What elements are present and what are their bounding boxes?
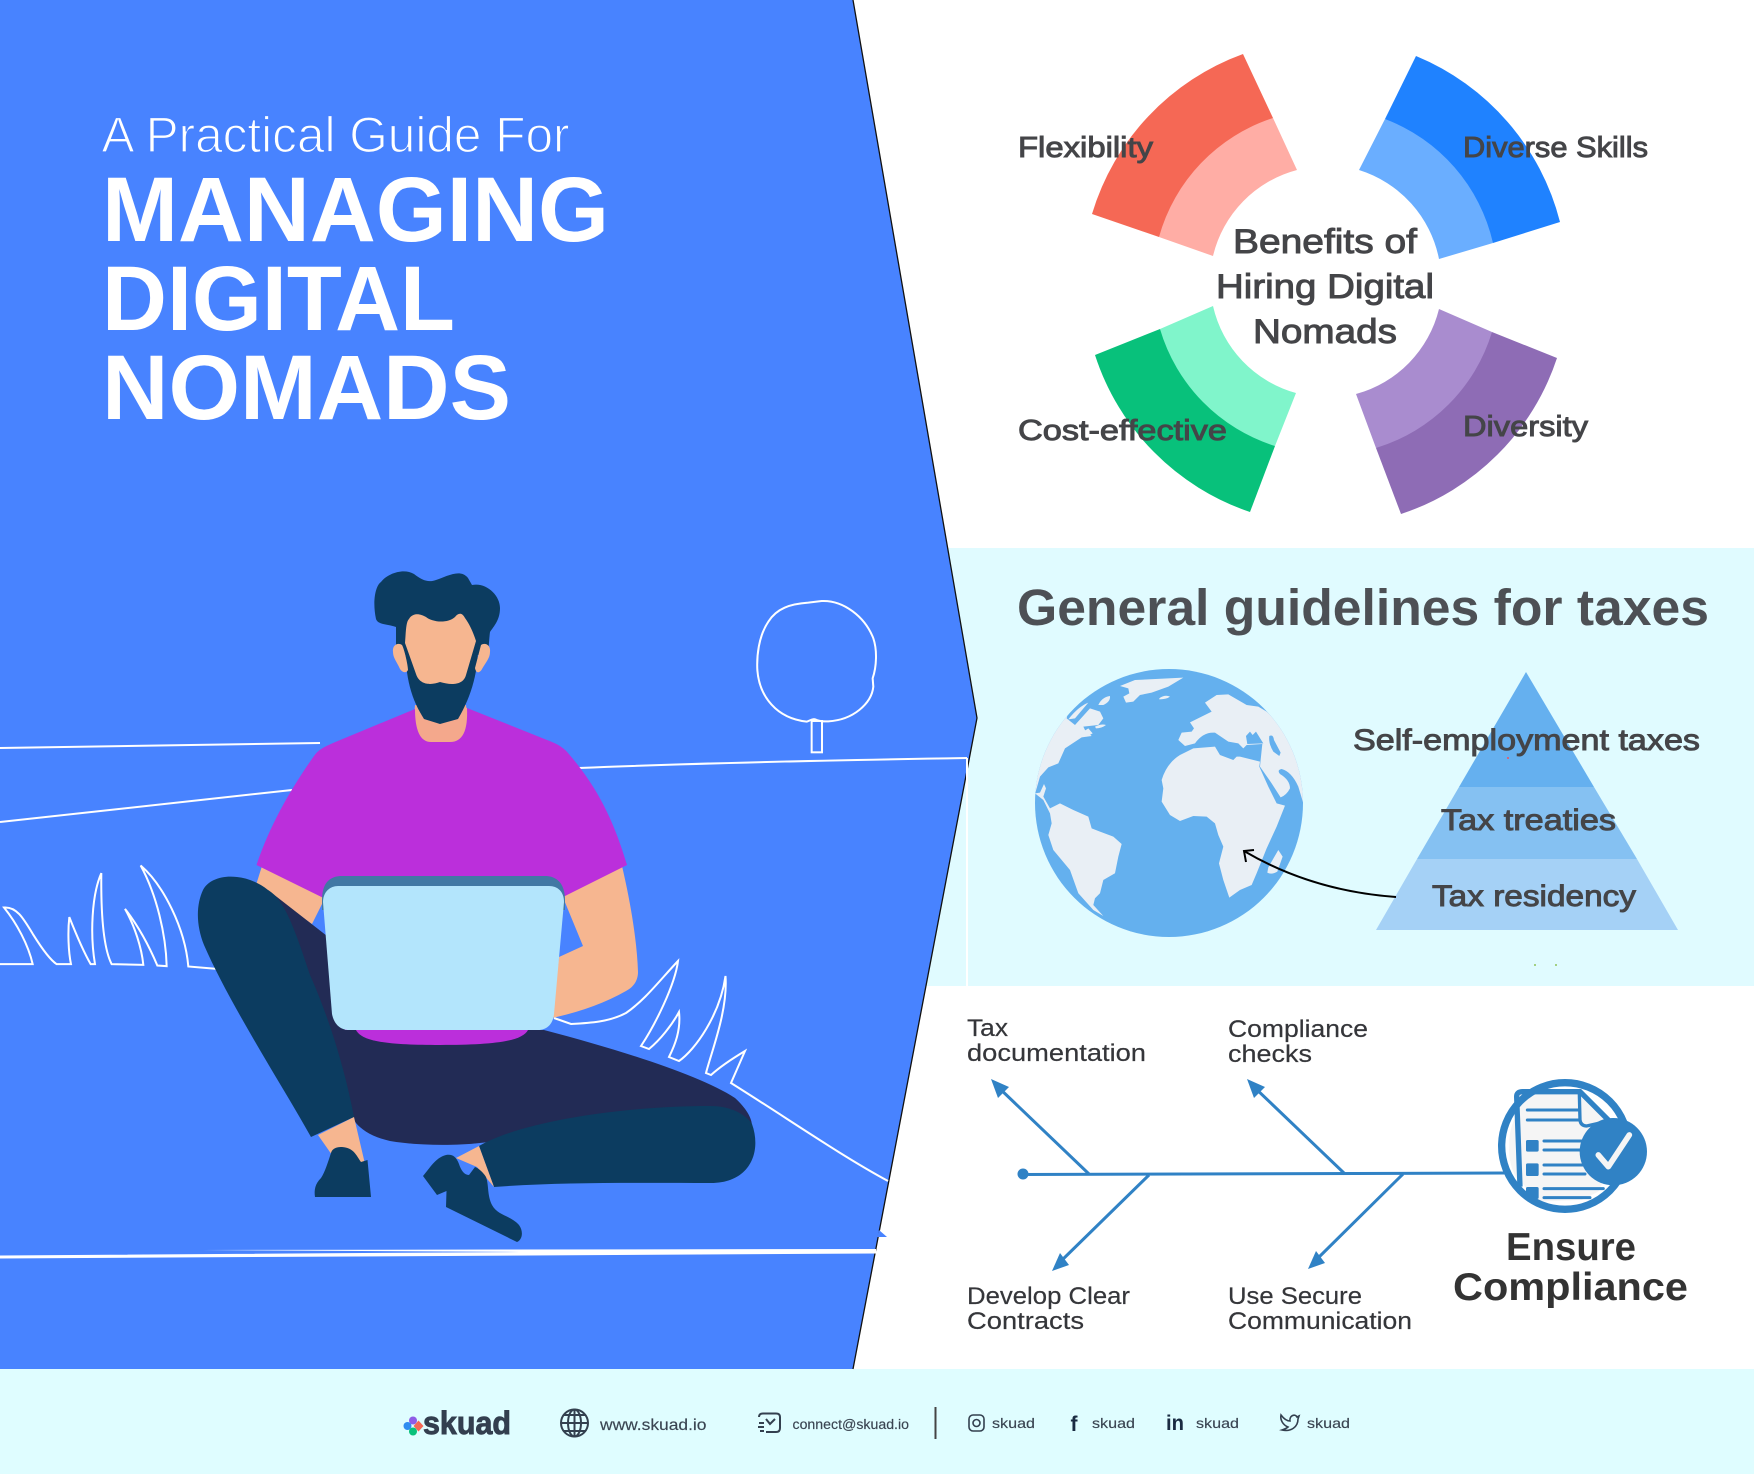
heading: ensure compliance: Compliance [1453, 1266, 1688, 1309]
text: instagram handle: skuad [992, 1415, 1035, 1431]
segment: diversity [1356, 309, 1557, 514]
level: tax residency [1376, 859, 1678, 930]
title [102, 107, 609, 439]
branch: compliance checks arrow [1247, 1079, 1345, 1174]
label: tax documentation: Tax [967, 1015, 1008, 1042]
text: email address: connect@skuad.io [792, 1417, 909, 1432]
label: use secure communication [1228, 1283, 1412, 1335]
panel: footer band [0, 1369, 1754, 1474]
icon: instagram [969, 1415, 984, 1431]
label: compliance checks [1228, 1016, 1368, 1068]
label: develop clear contracts: Contracts [967, 1308, 1084, 1335]
icon: tree outline [757, 601, 876, 752]
center title: benefits of hiring digital nomads: Benefits of [1233, 223, 1418, 261]
segment: flexibility [1092, 54, 1297, 256]
chart: fishbone diagram [967, 1015, 1505, 1335]
icon: grass outline [0, 865, 217, 969]
label: tax treaties: Tax treaties [1441, 804, 1616, 837]
face [405, 614, 476, 684]
subtitle: a practical guide for: A Practical Guide For [102, 107, 570, 163]
label: tax residency: Tax residency [1432, 880, 1636, 913]
right arm [552, 866, 638, 1018]
level: tax treaties [1417, 787, 1637, 859]
label: develop clear contracts [967, 1283, 1130, 1335]
label: flexibility: Flexibility [1018, 132, 1154, 164]
divider [934, 1407, 936, 1439]
footer contact row [404, 1405, 1350, 1441]
heading line: nomads: NOMADS [102, 337, 511, 439]
text: twitter handle: skuad [1307, 1415, 1350, 1431]
heading line: digital: DIGITAL [102, 248, 455, 350]
label: compliance checks: Compliance [1228, 1016, 1368, 1043]
heading: general guidelines for taxes: General guidelines for taxes [1017, 579, 1709, 636]
label: diversity: Diversity [1463, 411, 1589, 443]
level: self-employment taxes [1459, 672, 1594, 787]
label: compliance checks: checks [1228, 1041, 1312, 1068]
heading: ensure compliance: Ensure [1506, 1226, 1636, 1269]
neck [415, 705, 467, 742]
logo: skuad: skuad [423, 1405, 511, 1441]
shirt [256, 708, 627, 1044]
label: use secure communication: Use Secure [1228, 1283, 1362, 1310]
chart: tax pyramid [1353, 672, 1700, 966]
label: self-employment taxes: Self-employment taxes [1353, 724, 1700, 757]
icon: web globe [561, 1410, 588, 1436]
hair [374, 571, 500, 655]
icon: linkedin: in [1166, 1412, 1184, 1435]
heading line: managing: MANAGING [102, 159, 609, 261]
center title: benefits of hiring digital nomads [1216, 223, 1434, 351]
left leg [198, 877, 354, 1137]
branch: use secure communication arrow [1308, 1174, 1403, 1269]
chart: benefits radial segments [1018, 54, 1648, 514]
beard [405, 640, 478, 724]
laptop screen [323, 886, 564, 1030]
right lower leg [479, 1106, 755, 1187]
segment: cost-effective [1095, 306, 1296, 512]
text: facebook handle: skuad [1092, 1415, 1135, 1431]
center title: benefits of hiring digital nomads: Hiring Digital [1216, 268, 1434, 306]
center title: benefits of hiring digital nomads: Nomads [1253, 313, 1397, 351]
label: use secure communication: Communication [1228, 1308, 1412, 1335]
label: tax documentation: documentation [967, 1040, 1146, 1067]
right shoe [423, 1155, 522, 1242]
ears [393, 644, 490, 672]
spine [1023, 1173, 1505, 1174]
panel: blue left hero [0, 0, 977, 1369]
icon: facebook: f [1070, 1413, 1078, 1436]
branch: develop clear contracts arrow [1052, 1175, 1149, 1271]
icon: email [758, 1414, 780, 1432]
landscape outline drawing [0, 601, 967, 1258]
label: diverse skills: Diverse Skills [1463, 132, 1648, 164]
label: develop clear contracts: Develop Clear [967, 1283, 1130, 1310]
text: website: www.skuad.io [599, 1417, 707, 1434]
icon: twitter [1281, 1415, 1299, 1430]
left foot skin [318, 1117, 365, 1164]
icon: compliance document with check [1502, 1083, 1647, 1209]
arrow: pyramid to globe [1244, 850, 1396, 897]
left arm [256, 866, 326, 924]
label: cost-effective: Cost-effective [1018, 415, 1227, 447]
branch: tax documentation arrow [991, 1079, 1089, 1174]
heading: ensure compliance [1453, 1226, 1688, 1309]
left shoe [315, 1147, 371, 1197]
panel: tax guidelines background band [920, 548, 1754, 986]
pants: thigh [268, 890, 752, 1145]
right foot skin [456, 1146, 494, 1187]
text: linkedin handle: skuad [1196, 1415, 1239, 1431]
segment: diverse skills [1359, 56, 1560, 259]
label: tax documentation [967, 1015, 1146, 1067]
illustration: man with laptop [198, 571, 755, 1242]
icon: world globe [1035, 669, 1303, 937]
laptop back [322, 876, 565, 910]
